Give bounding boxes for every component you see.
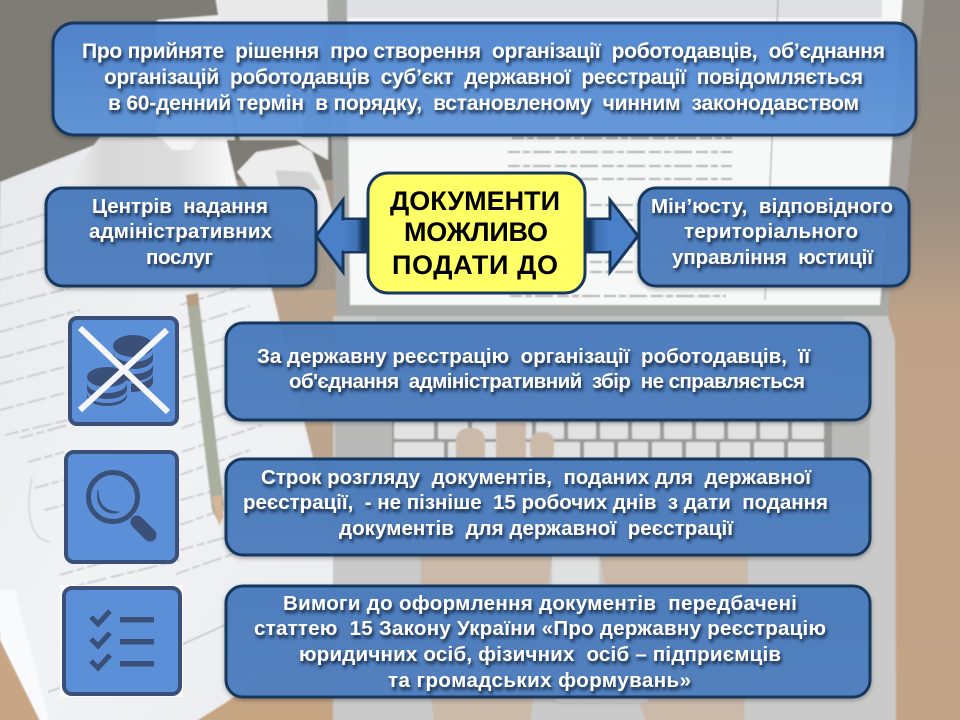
pencil bbox=[186, 293, 224, 525]
paper text lines bbox=[0, 214, 262, 590]
panel: documents can be submitted to: ПОДАТИ ДО bbox=[392, 250, 558, 280]
panel: ministry of justice: територіального bbox=[684, 220, 858, 243]
panel: administrative service centres: Центрів надання bbox=[92, 195, 268, 218]
crumpled paper bbox=[215, 0, 330, 140]
panel: no administrative fee: За державну реєстрацію організації роботодавців, її bbox=[257, 345, 811, 368]
panel: administrative service centres: адміністративних bbox=[89, 220, 273, 243]
panel: administrative service centres: послуг bbox=[146, 246, 213, 269]
panel: review period: Строк розгляду документів, поданих для державної bbox=[261, 466, 812, 489]
panel: documents can be submitted to bbox=[368, 173, 585, 293]
panel: no administrative fee: об'єднання адміністративний збір не справляється bbox=[289, 370, 805, 393]
laptop screen bbox=[327, 0, 905, 318]
panel: ministry of justice: Мін’юсту, відповідного bbox=[651, 195, 893, 218]
panel: registration notice bbox=[53, 23, 916, 135]
panel: registration notice: Про прийняте рішення про створення організації роботодавців, об’єднання bbox=[82, 40, 885, 63]
panel: administrative service centres bbox=[46, 188, 316, 286]
icon: checklist bbox=[60, 585, 183, 697]
panel: document requirements bbox=[226, 586, 870, 697]
panel: document requirements: юридичних осіб, фізичних осіб – підприємців bbox=[299, 643, 781, 666]
arrow: right bbox=[586, 200, 638, 272]
panel: ministry of justice: управління юстиції bbox=[672, 246, 874, 269]
panel: review period: реєстрації, - не пізніше 15 робочих днів з дати подання bbox=[243, 491, 828, 514]
keyboard bbox=[392, 420, 832, 462]
paper sheet bbox=[0, 137, 338, 720]
icon: magnifying glass bbox=[66, 452, 177, 562]
panel: documents can be submitted to: МОЖЛИВО bbox=[404, 217, 548, 247]
hands bbox=[552, 550, 599, 590]
icon: crossed-out coins bbox=[70, 318, 177, 424]
panel: registration notice: в 60-денний термін в порядку, встановленому чинним законодавством bbox=[108, 92, 859, 115]
panel: documents can be submitted to: ДОКУМЕНТИ bbox=[390, 186, 560, 216]
panel: no administrative fee bbox=[226, 323, 870, 420]
panel: document requirements: та громадських формувань» bbox=[388, 669, 691, 692]
panel: registration notice: організацій роботодавців суб’єкт державної реєстрації повідомляється bbox=[104, 66, 863, 89]
panel: ministry of justice bbox=[639, 188, 909, 286]
panel: document requirements: статтею 15 Закону України «Про державну реєстрацію bbox=[254, 617, 826, 640]
arrow: left bbox=[316, 200, 367, 272]
panel: document requirements: Вимоги до оформлення документів передбачені bbox=[283, 592, 797, 615]
panel: review period bbox=[226, 459, 870, 555]
panel: review period: документів для державної реєстрації bbox=[339, 517, 734, 540]
laptop base bbox=[333, 316, 896, 720]
